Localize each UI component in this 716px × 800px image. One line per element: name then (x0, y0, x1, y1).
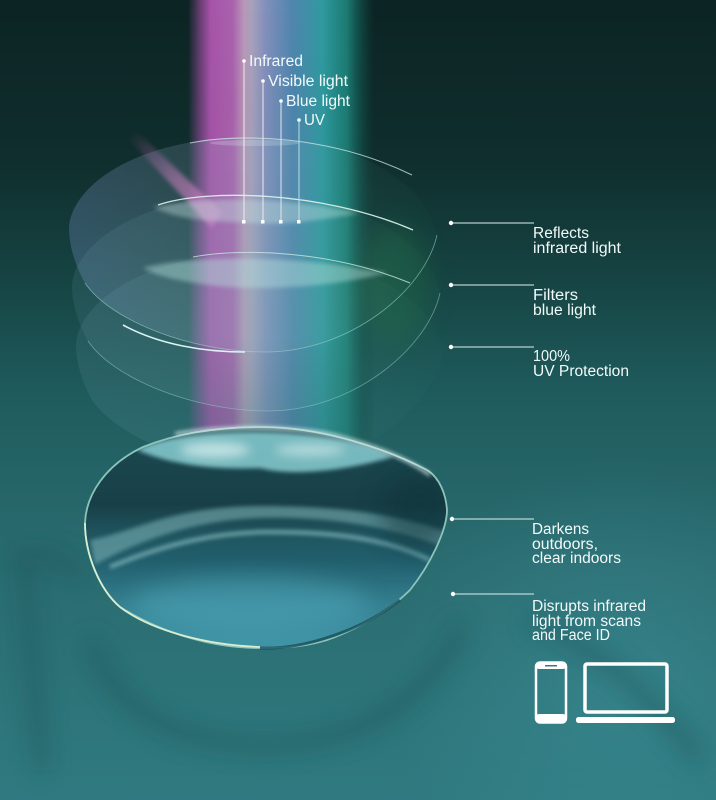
reflection of the third layer (137, 432, 393, 472)
label: visible light: Visible light (268, 73, 349, 90)
icon: phone (536, 662, 566, 723)
main lens (85, 427, 460, 648)
label: blue light (279, 93, 351, 224)
callout: darkens outdoors: Darkens (532, 521, 589, 538)
callout: disrupts infrared: and Face ID (532, 627, 610, 644)
callout: reflects infrared light: infrared light (533, 240, 622, 257)
callout: UV protection: 100% (533, 348, 570, 365)
lens layer: UV protection (76, 252, 444, 470)
callout: filters blue light: blue light (533, 302, 597, 319)
callout: disrupts infrared (451, 592, 646, 644)
light beam (189, 0, 370, 439)
callout: darkens outdoors: clear indoors (532, 550, 621, 567)
icon: laptop (576, 664, 675, 723)
green glow beside the beam (360, 225, 430, 345)
spectrum labels (242, 53, 351, 224)
callout: disrupts infrared: light from scans (532, 613, 641, 630)
label: UV (297, 112, 326, 224)
label: infrared: Infrared (249, 53, 303, 70)
label: infrared (242, 53, 303, 224)
callout: darkens outdoors: outdoors, (532, 536, 598, 553)
label: blue light: Blue light (286, 93, 351, 110)
blurred glasses frame behind the lens (10, 556, 700, 770)
lens reflection bands (90, 506, 447, 565)
callout: darkens outdoors (450, 517, 621, 567)
label: UV: UV (304, 112, 326, 129)
callout: UV protection (449, 345, 629, 380)
label: visible light (261, 73, 349, 224)
reflected infrared ray (122, 128, 222, 228)
callout: reflects infrared light (449, 221, 622, 257)
lens layer: reflects infrared (69, 137, 437, 353)
callout: filters blue light (449, 283, 597, 319)
callout: reflects infrared light: Reflects (533, 225, 589, 242)
lens layer: filters blue light (72, 195, 440, 411)
callout: UV protection: UV Protection (533, 363, 629, 380)
callout: disrupts infrared: Disrupts infrared (532, 598, 646, 615)
callout: filters blue light: Filters (533, 287, 578, 304)
